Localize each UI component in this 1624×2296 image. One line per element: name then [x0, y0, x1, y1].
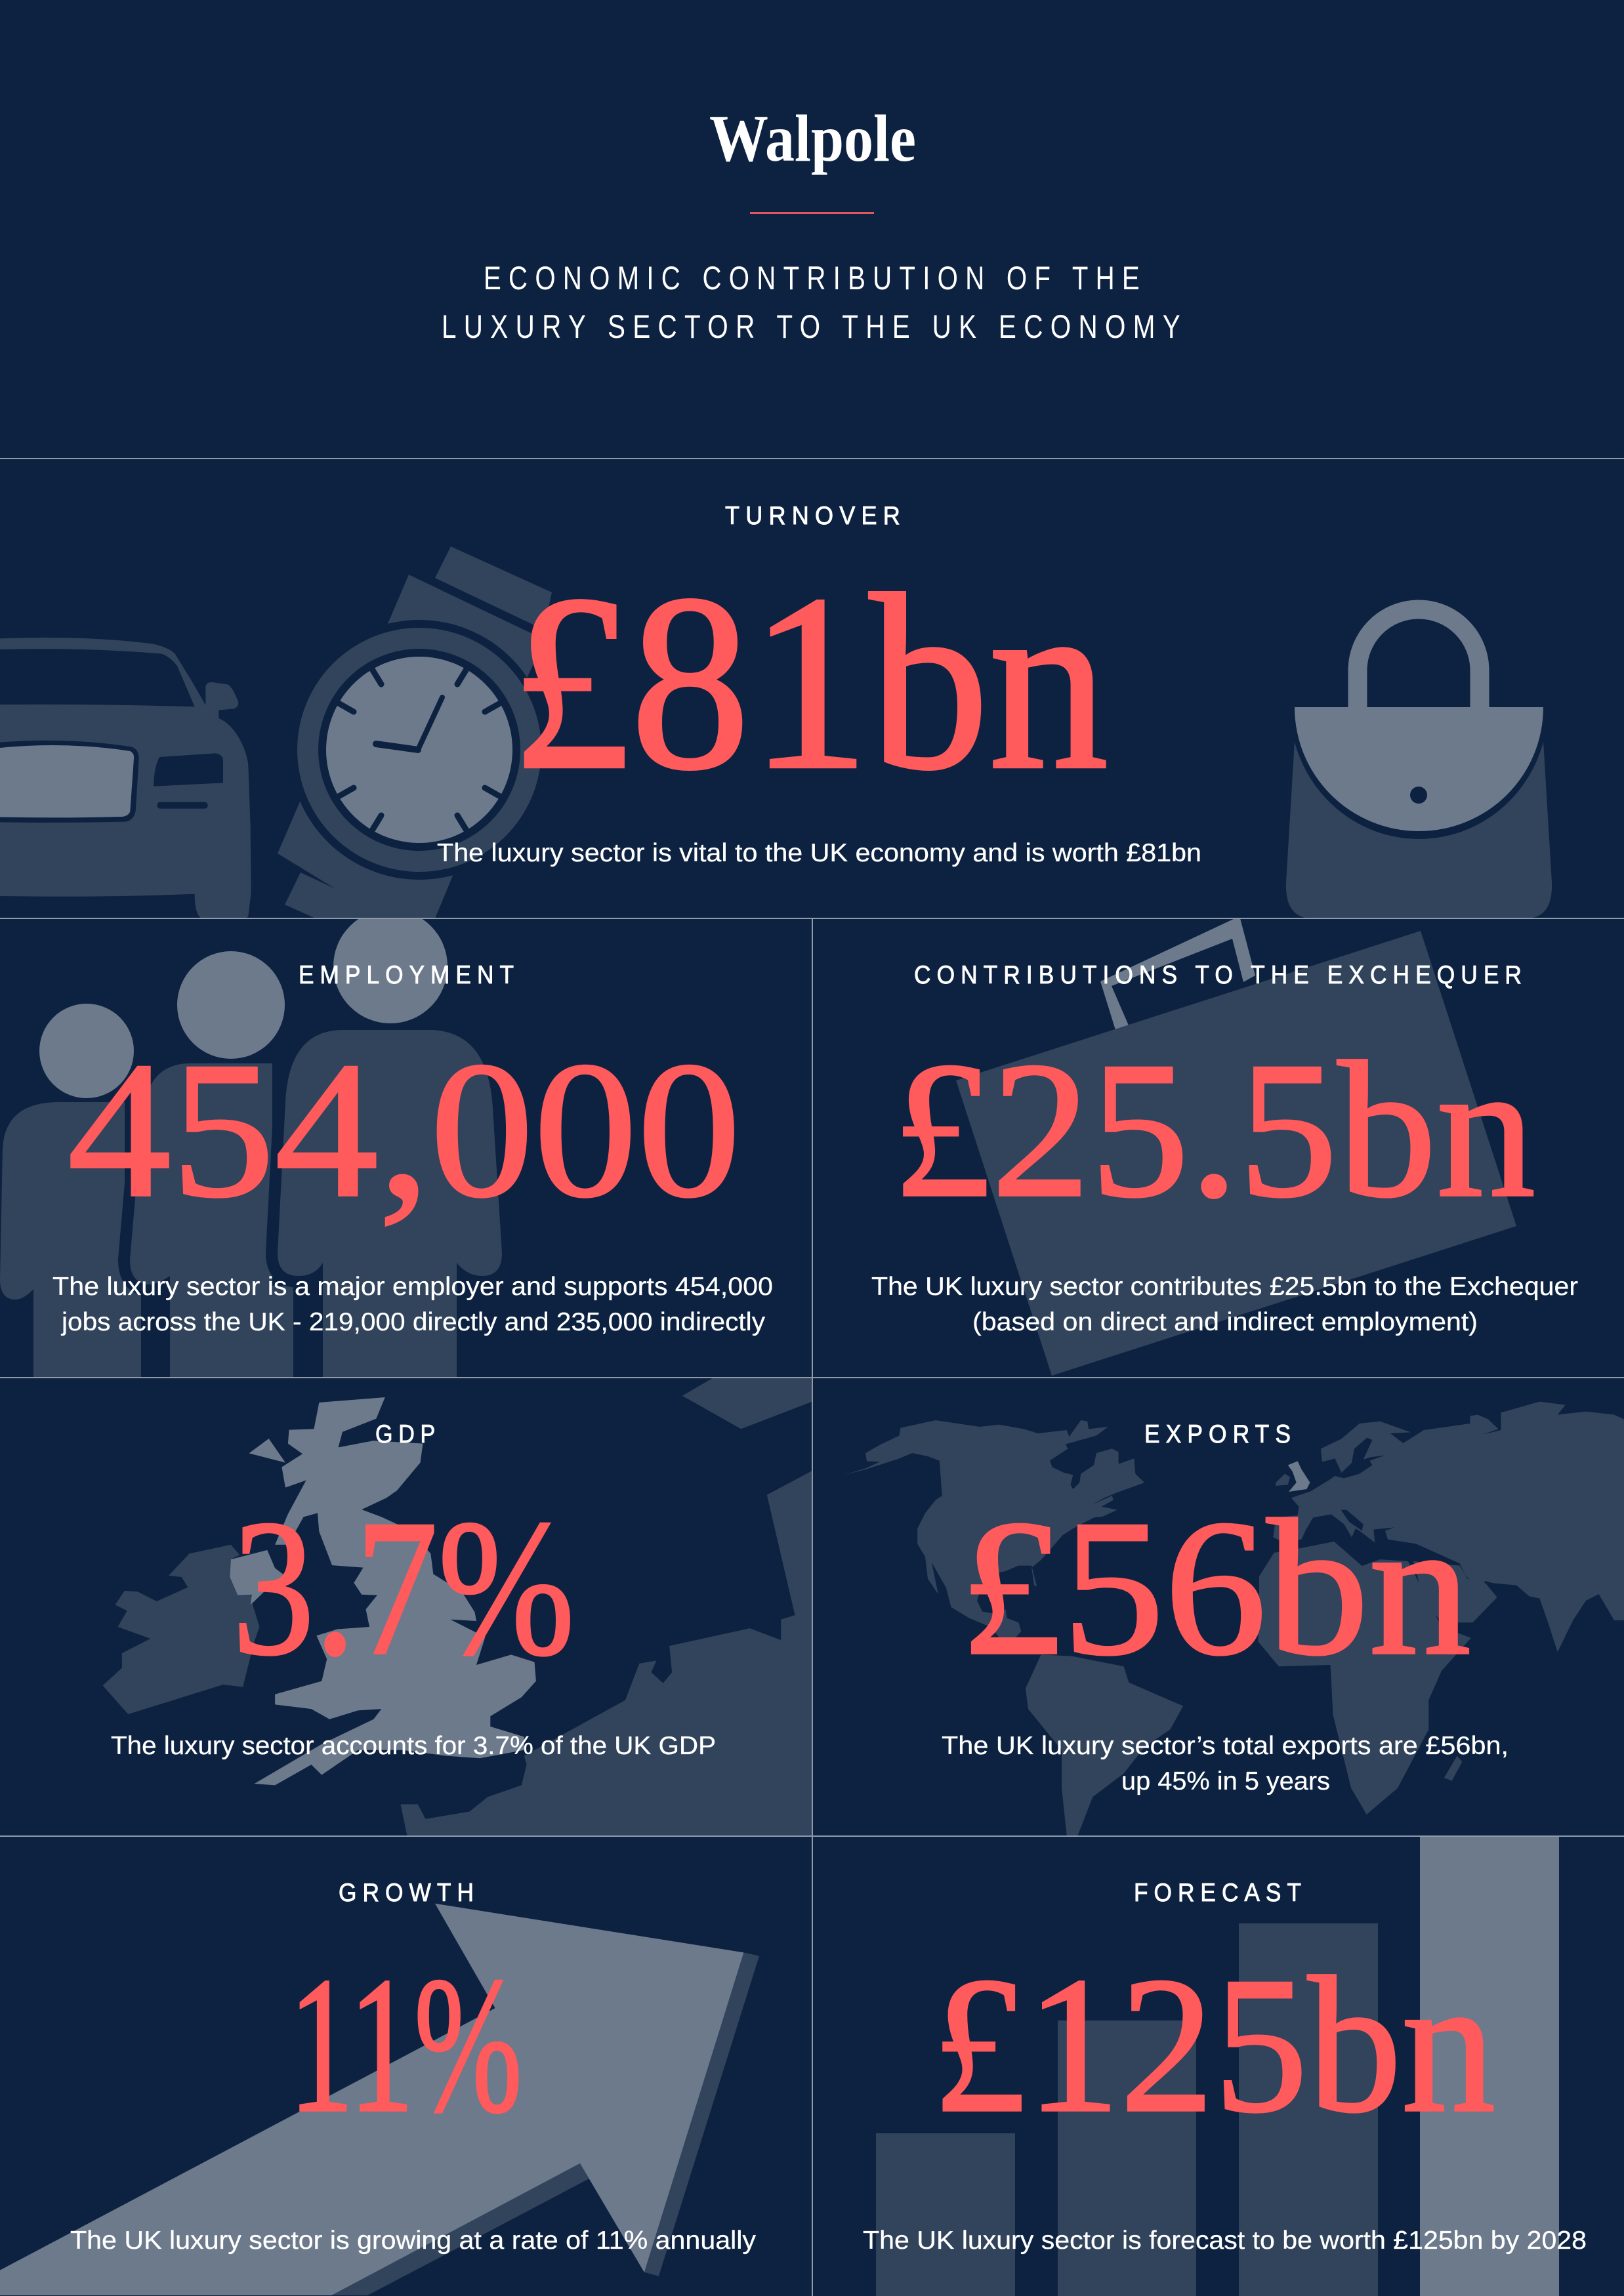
icon: handbag — [1286, 609, 1552, 918]
panel: turnover — [0, 502, 1552, 918]
description: The UK luxury sector contributes £25.5bn to the Exchequer — [871, 1273, 1578, 1301]
label: CONTRIBUTIONS TO THE EXCHEQUER — [914, 961, 1528, 989]
description: (based on direct and indirect employment) — [972, 1308, 1478, 1336]
panel: exports — [843, 1402, 1624, 1837]
label: EMPLOYMENT — [299, 961, 520, 989]
label: GROWTH — [339, 1879, 480, 1907]
icon: UK map — [103, 1378, 814, 1837]
bar chart icon — [876, 1837, 1559, 2296]
description: The luxury sector accounts for 3.7% of the UK GDP — [111, 1732, 716, 1760]
icon: briefcase — [956, 918, 1516, 1376]
figure: £56bn — [960, 1480, 1471, 1696]
title: LUXURY SECTOR TO THE UK ECONOMY — [442, 308, 1188, 345]
description: The UK luxury sector is growing at a rate of 11% annually — [70, 2226, 757, 2255]
icon: people — [0, 909, 502, 1381]
title — [442, 260, 1188, 345]
description: The UK luxury sector is forecast to be worth £125bn by 2028 — [863, 2226, 1587, 2255]
description: The UK luxury sector’s total exports are £56bn, — [942, 1732, 1509, 1760]
icon: car — [0, 638, 251, 918]
label: TURNOVER — [725, 502, 906, 530]
label: EXPORTS — [1144, 1420, 1297, 1448]
panel: gdp — [103, 1378, 814, 1837]
description — [871, 1273, 1578, 1336]
description: The luxury sector is vital to the UK economy and is worth £81bn — [437, 839, 1201, 867]
accent rule — [750, 212, 874, 214]
figure: 11% — [289, 1937, 522, 2153]
icon: world map — [843, 1402, 1624, 1837]
description — [52, 1273, 773, 1336]
title: ECONOMIC CONTRIBUTION OF THE — [484, 260, 1147, 297]
description: jobs across the UK - 219,000 directly and 235,000 indirectly — [61, 1308, 766, 1336]
header — [442, 102, 1188, 345]
label: GDP — [375, 1420, 441, 1448]
figure: £81bn — [511, 543, 1108, 821]
figure: £25.5bn — [892, 1022, 1535, 1238]
description: The luxury sector is a major employer and supports 454,000 — [52, 1273, 773, 1301]
panel: contributions to the exchequer — [871, 918, 1578, 1376]
figure: £125bn — [932, 1937, 1495, 2153]
panel: growth — [0, 1879, 759, 2295]
panel: employment — [0, 909, 773, 1381]
label: FORECAST — [1134, 1879, 1307, 1907]
panel: forecast — [863, 1837, 1587, 2296]
figure: 3.7% — [232, 1480, 575, 1696]
logo: Walpole: Walpole — [709, 102, 916, 176]
figure: 454,000 — [68, 1022, 741, 1238]
description: up 45% in 5 years — [1121, 1767, 1330, 1795]
icon: watch — [278, 546, 552, 918]
description — [942, 1732, 1509, 1795]
icon: arrow — [0, 1904, 759, 2295]
